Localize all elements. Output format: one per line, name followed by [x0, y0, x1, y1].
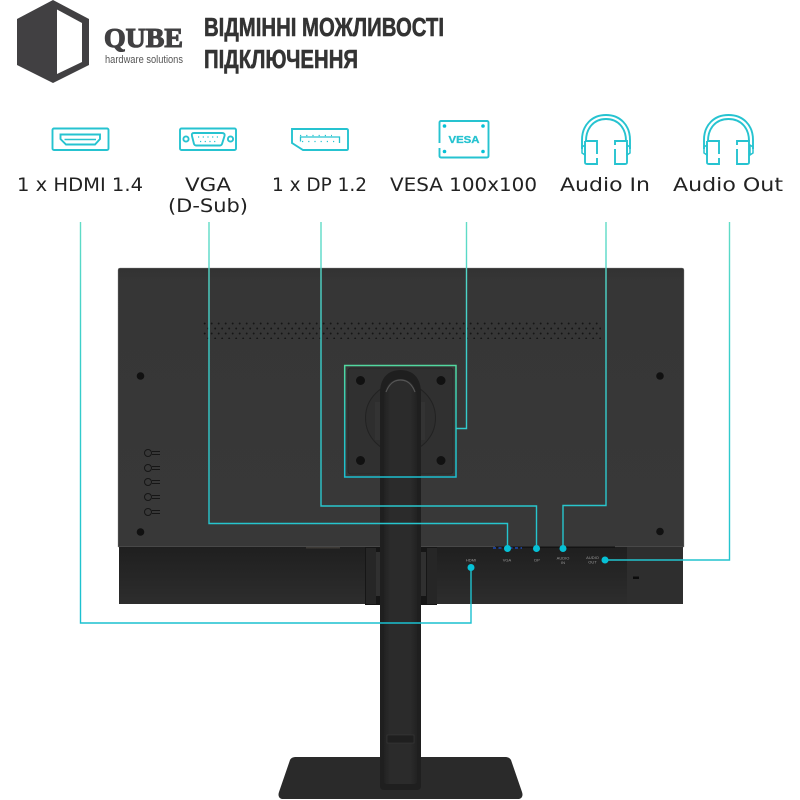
VESA mount plate: [348, 368, 453, 474]
icon: DisplayPort: [292, 129, 348, 150]
label: VGA (D-Sub): [168, 174, 248, 217]
stand base: [278, 757, 523, 799]
label: VGA (D-Sub): (D-Sub): [168, 195, 248, 217]
title: ВІДМІННІ МОЖЛИВОСТІ: [204, 12, 444, 42]
port labels: DP: [534, 558, 540, 562]
callout line: Audio In: [560, 222, 606, 552]
monitor rear photo: [118, 268, 684, 799]
title: [204, 12, 444, 74]
callout line: DP: [321, 222, 540, 552]
callout: VESA mount box: [345, 366, 456, 477]
callout line: Audio Out: [602, 222, 730, 564]
label: Audio Out: Audio Out: [673, 174, 783, 196]
port labels: OUT: [588, 560, 597, 564]
icon: VGA port: [180, 128, 236, 150]
logo wordmark: QUBE: [104, 23, 183, 53]
callout line: HDMI: [80, 222, 474, 623]
monitor screw holes: [137, 372, 664, 536]
speaker vent: [203, 321, 601, 339]
label: 1 x DP 1.2: 1 x DP 1.2: [272, 174, 367, 196]
logo tagline: hardware solutions: [105, 54, 183, 66]
logo hexagon: [17, 0, 89, 83]
label: VGA (D-Sub): VGA: [185, 174, 231, 196]
kensington lock slot: [633, 576, 639, 579]
icon: HDMI port: [52, 128, 108, 150]
callout line: VESA: [456, 222, 466, 428]
title: ПІДКЛЮЧЕННЯ: [204, 44, 358, 74]
port labels: [466, 555, 599, 565]
label: Audio In: Audio In: [560, 174, 650, 196]
icon: headphones audio out: [704, 115, 753, 164]
port labels: VGA: [503, 558, 512, 562]
monitor upper back panel: [118, 268, 684, 547]
callout line: VGA: [209, 222, 511, 552]
port labels: HDMI: [466, 558, 476, 562]
port labels: IN: [561, 560, 565, 565]
stand neck: [380, 370, 421, 790]
icon: headphones audio in: [582, 115, 630, 164]
label: 1 x HDMI 1.4: 1 x HDMI 1.4: [17, 174, 143, 196]
icon: VESA plate: [440, 121, 488, 158]
label: VESA 100x100: VESA 100x100: [390, 174, 537, 196]
port labels: AUDIO: [557, 556, 569, 560]
VGA connector marks: [493, 547, 522, 549]
logo: QUBE hardware solutions: [17, 0, 183, 83]
icon: VESA plate: VESA: [448, 135, 480, 146]
monitor lower back panel: [119, 546, 683, 605]
port labels: AUDIO: [586, 555, 599, 560]
OSD buttons: [144, 450, 160, 516]
